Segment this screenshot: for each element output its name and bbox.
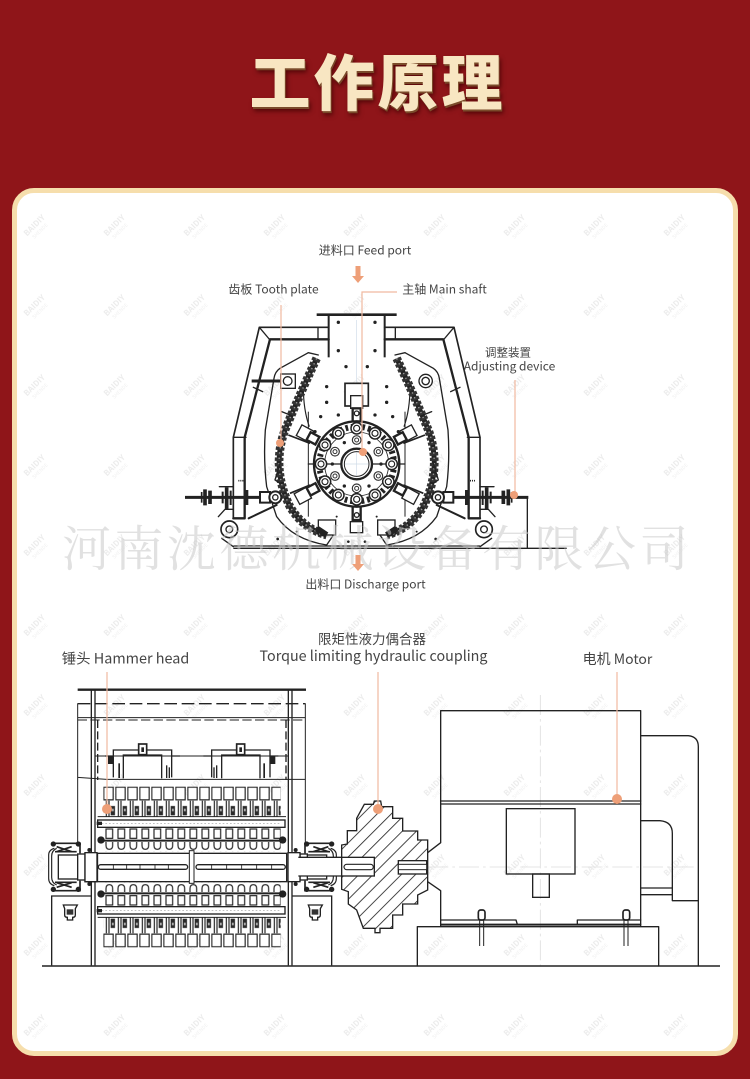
label: hammer head bbox=[62, 648, 189, 814]
bearing left bbox=[49, 841, 97, 892]
fluid coupling bbox=[342, 801, 428, 933]
label: tooth plate bbox=[228, 280, 319, 447]
lower feed box bbox=[350, 505, 363, 533]
hammer rows bbox=[97, 787, 286, 947]
base line bbox=[233, 497, 567, 548]
company watermark: 河南沈德机械设备有限公司 bbox=[62, 511, 692, 581]
housing bbox=[78, 690, 306, 965]
label: feed port bbox=[319, 242, 412, 283]
bearing right bbox=[288, 841, 336, 892]
left half of frame bbox=[185, 315, 350, 547]
main shaft bbox=[85, 851, 287, 883]
upper feed box bbox=[345, 383, 368, 422]
label: adjusting device bbox=[464, 344, 556, 499]
label: discharge port: 出料口 Discharge port bbox=[305, 576, 426, 592]
clamps bbox=[105, 744, 278, 778]
diagram: crusher cross section bbox=[185, 315, 567, 548]
rotor bbox=[308, 421, 405, 507]
label: hydraulic coupling bbox=[260, 628, 487, 814]
label: main shaft: 主轴 Main shaft bbox=[402, 280, 487, 298]
label: discharge port bbox=[305, 555, 426, 592]
diagram: rotor side view bbox=[49, 690, 342, 965]
centre lines bbox=[428, 695, 697, 967]
title: 工作原理 bbox=[249, 34, 506, 123]
diagram: coupling and motor bbox=[342, 695, 698, 967]
pedestals bbox=[52, 896, 332, 965]
label: adjusting device: Adjusting device bbox=[464, 358, 556, 374]
motor body bbox=[417, 711, 698, 966]
label: hydraulic coupling: 限矩性液力偶合器 bbox=[318, 628, 426, 648]
label: hydraulic coupling: Torque limiting hydraulic coupling bbox=[260, 645, 487, 666]
label: adjusting device: 调整装置 bbox=[485, 344, 531, 360]
label: hammer head: 锤头 Hammer head bbox=[62, 648, 189, 668]
label: feed port: 进料口 Feed port bbox=[319, 242, 412, 258]
shaft end bbox=[298, 857, 342, 876]
watermark grid bbox=[17, 193, 733, 1051]
ground line bbox=[42, 965, 720, 967]
right half of frame bbox=[364, 315, 528, 547]
screw block bbox=[252, 374, 295, 388]
pivot wheel bbox=[419, 374, 432, 388]
label: motor: 电机 Motor bbox=[583, 649, 653, 669]
panel: white card bbox=[12, 188, 738, 1056]
label: main shaft bbox=[359, 280, 487, 456]
hopper flange bbox=[317, 311, 397, 319]
label: tooth plate: 齿板 Tooth plate bbox=[228, 280, 319, 298]
label: motor bbox=[583, 649, 653, 804]
